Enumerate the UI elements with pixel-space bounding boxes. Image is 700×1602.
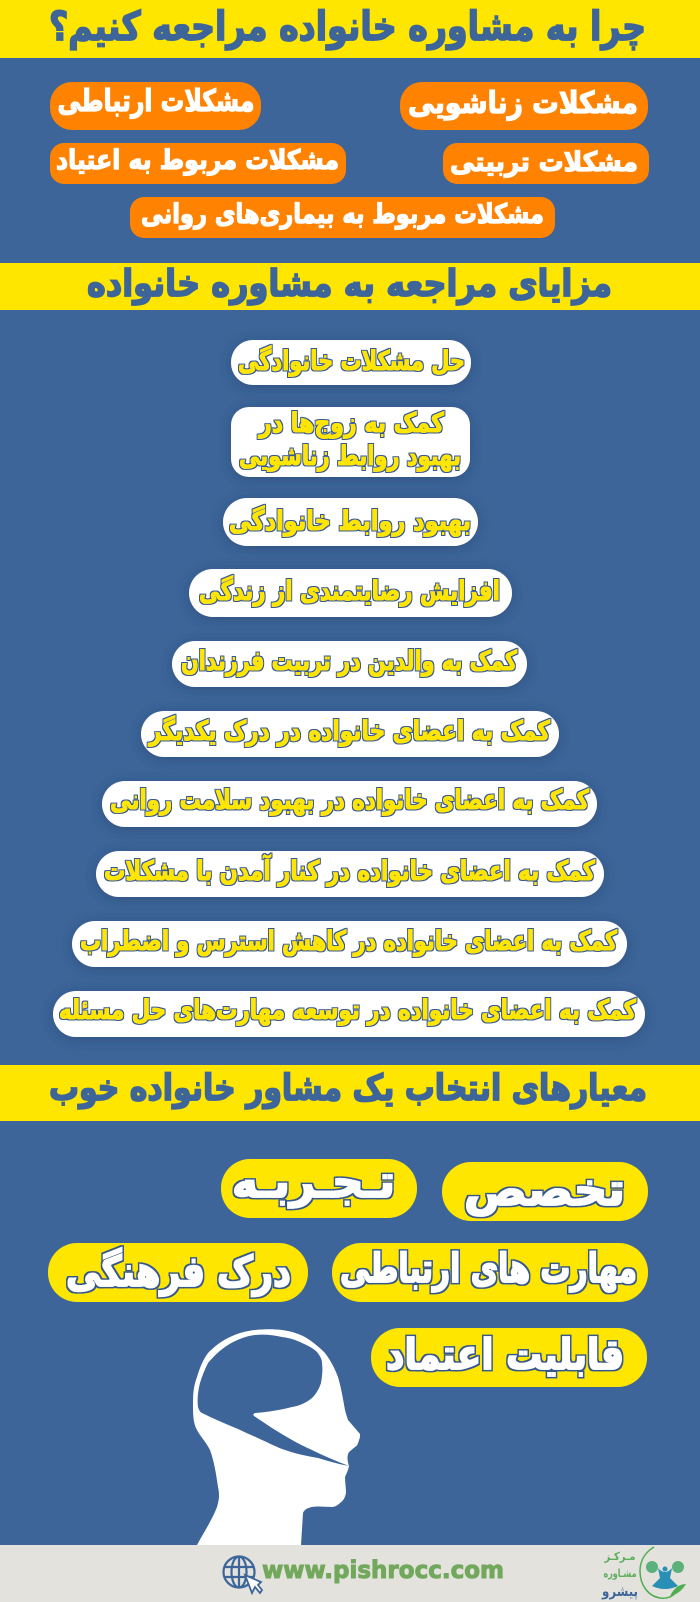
chip: parenting problems: مشکلات تربیتی — [450, 147, 638, 178]
pill: expertise — [442, 1162, 648, 1221]
footer — [0, 1545, 700, 1602]
pill: benefit 3 — [223, 498, 478, 546]
pill: benefit 2: کمک به زوج‌ها در — [257, 408, 444, 439]
chip: marital problems — [400, 82, 648, 130]
speech bubble — [198, 1335, 349, 1466]
pill: benefit 6 — [141, 711, 559, 757]
chip: addiction problems — [50, 143, 346, 184]
pill: benefit 5 — [172, 641, 527, 687]
chip: communication problems — [50, 82, 261, 130]
website url: www.pishrocc.com — [262, 1556, 504, 1584]
pill: benefit 9 — [72, 921, 627, 967]
pill: benefit 2 — [231, 407, 470, 477]
pill: benefit 1 — [231, 340, 471, 385]
panel: benefits list — [53, 340, 645, 1037]
pill: benefit 1: حل مشکلات خانوادگی — [238, 345, 465, 377]
logo: pishro counselling center: مـرکـز — [604, 1550, 636, 1563]
chip: mental illness problems — [130, 197, 555, 238]
pill: benefit 4: افزایش رضایتمندی از زندگی — [199, 575, 500, 607]
panel: criteria — [48, 1155, 648, 1387]
chip: marital problems: مشکلات زناشویی — [408, 86, 638, 121]
icon: globe with cursor — [224, 1556, 262, 1593]
logo: pishro counselling center: مشـاوره — [604, 1567, 636, 1580]
pill: trustworthiness: قابلیت اعتماد — [386, 1330, 624, 1379]
chip: communication problems: مشکلات ارتباطی — [58, 84, 254, 119]
pill: benefit 7 — [102, 781, 597, 827]
pill: benefit 6: کمک به اعضای خانواده در درک یکدیگر — [147, 715, 550, 747]
panel: family problems — [50, 82, 649, 238]
section heading: benefits: مزایای مراجعه به مشاوره خانواده — [87, 262, 612, 305]
chip: addiction problems: مشکلات مربوط به اعتیاد — [56, 145, 339, 176]
pill: experience: تـجـربـه — [232, 1155, 395, 1208]
pill: benefit 10 — [53, 991, 645, 1037]
logo: pishro counselling center — [601, 1547, 686, 1600]
pill: benefit 4 — [189, 569, 512, 617]
chip: mental illness problems: مشکلات مربوط به بیماری‌های روانی — [141, 199, 544, 230]
pill: benefit 3: بهبود روابط خانوادگی — [229, 505, 471, 537]
section heading: criteria — [0, 1065, 700, 1121]
logo: pishro counselling center: پیشرو — [601, 1584, 638, 1600]
title banner — [0, 0, 700, 58]
pill: benefit 2: بهبود روابط زناشویی — [239, 441, 461, 472]
pill: expertise: تخصص — [464, 1163, 625, 1216]
pill: benefit 5: کمک به والدین در تربیت فرزندان — [181, 646, 517, 677]
icon: head with speech bubble — [193, 1329, 360, 1545]
pill: communication skills — [332, 1243, 648, 1302]
pill: cultural understanding: درک فرهنگی — [66, 1247, 291, 1297]
pill: benefit 8 — [96, 851, 604, 897]
